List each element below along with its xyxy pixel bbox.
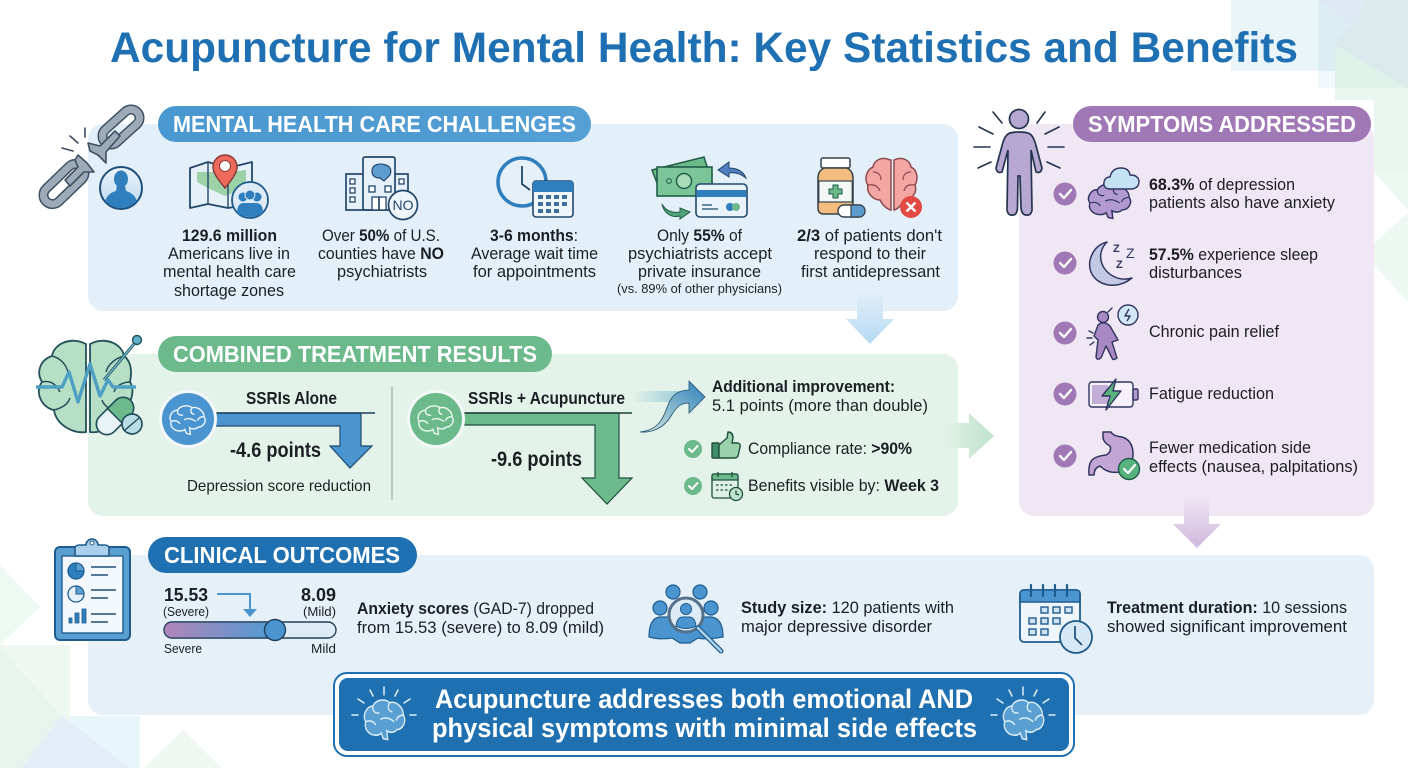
text: additional improvement xyxy=(712,378,928,415)
icon: moon and Z: Z xyxy=(1116,259,1123,271)
callout: key takeaway: Acupuncture addresses both emotional AND xyxy=(435,684,973,714)
text: anxiety scores: Anxiety scores (GAD-7) dropped xyxy=(357,600,594,618)
chart: SSRIs alone: -4.6 points xyxy=(230,439,321,462)
text: study size xyxy=(741,599,954,636)
divider xyxy=(391,387,393,500)
panel: combined treatment results xyxy=(36,336,958,516)
text: 3-6 months: 3-6 months: xyxy=(490,227,578,245)
icon: people with magnifier xyxy=(649,585,723,651)
stat: insurance xyxy=(617,157,782,296)
title: Acupuncture for Mental Health: Key Statistics and Benefits xyxy=(110,24,1298,72)
chart: severity scale: (Mild) xyxy=(303,605,336,619)
chart: SSRIs plus acupuncture: -9.6 points xyxy=(491,448,582,471)
arrow: results to symptoms xyxy=(940,413,994,459)
text: 55 percent: Only 55% of xyxy=(657,227,742,245)
text: 55 percent xyxy=(617,227,782,296)
item: benefits visible: Benefits visible by: Week 3 xyxy=(748,477,939,495)
item: benefits visible xyxy=(684,472,939,500)
item: side effects: Fewer medication side xyxy=(1149,439,1311,457)
chart: SSRIs plus acupuncture: SSRIs + Acupuncture xyxy=(468,388,625,408)
icon: person with rays xyxy=(974,110,1064,215)
arrow: symptoms to outcomes xyxy=(1173,495,1221,548)
icon: broken chain and person xyxy=(40,106,143,209)
icon: battery with bolt xyxy=(1089,379,1138,410)
chart: severity scale: (Severe) xyxy=(163,605,209,619)
item: depression and anxiety: patients also have anxiety xyxy=(1149,194,1336,212)
icon: blue brain circle xyxy=(159,390,217,448)
chart: SSRIs alone: Depression score reduction xyxy=(187,478,371,495)
item: sleep: 57.5% experience sleep xyxy=(1149,246,1318,264)
text: treatment duration xyxy=(1107,599,1347,636)
item: compliance rate: Compliance rate: >90% xyxy=(748,440,912,458)
icon: brain with needle and pills xyxy=(36,336,142,439)
text: 129.6 million: shortage zones xyxy=(174,282,284,300)
panel: clinical outcomes xyxy=(55,537,1374,715)
stat: shortage zones xyxy=(163,155,296,300)
heading: challenges xyxy=(158,106,591,142)
icon: brain right xyxy=(991,687,1055,740)
arrow: green down xyxy=(445,413,632,504)
text: 129.6 million: mental health care xyxy=(163,263,296,281)
item: chronic pain xyxy=(1054,305,1279,360)
icon: calendar with clock xyxy=(712,472,742,500)
panel: symptoms addressed xyxy=(974,106,1374,516)
chart: SSRIs plus acupuncture xyxy=(407,388,632,504)
heading: symptoms xyxy=(1073,106,1371,142)
item: sleep xyxy=(1054,242,1318,285)
stat: counties xyxy=(318,157,444,281)
text: treatment duration: showed significant improvement xyxy=(1107,618,1347,636)
text: 3-6 months: Average wait time xyxy=(471,245,598,263)
item: chronic pain: Chronic pain relief xyxy=(1149,323,1279,341)
icon: clipboard xyxy=(55,539,130,640)
text: study size: Study size: 120 patients with xyxy=(741,599,954,617)
item: side effects: effects (nausea, palpitations) xyxy=(1149,458,1358,476)
text: 129.6 million: 129.6 million xyxy=(182,227,277,245)
icon: brain with cloud xyxy=(1088,168,1139,218)
panel: mental health care challenges xyxy=(40,106,958,311)
callout: key takeaway xyxy=(334,673,1074,756)
text: 129.6 million: Americans live in xyxy=(168,245,290,263)
text: treatment duration: Treatment duration: 10 sessions xyxy=(1107,599,1347,617)
icon: moon and Z xyxy=(1090,242,1135,285)
heading: outcomes: CLINICAL OUTCOMES xyxy=(164,542,400,568)
text: 50 percent of counties: psychiatrists xyxy=(337,263,427,281)
text: 3-6 months xyxy=(471,227,598,281)
text: 50 percent of counties xyxy=(318,227,444,281)
item: sleep: disturbances xyxy=(1149,264,1242,282)
icon: money and card xyxy=(652,157,747,219)
icon: pill bottle and brain xyxy=(818,158,922,218)
chart: severity scale: Severe xyxy=(164,642,202,656)
text: 55 percent: (vs. 89% of other physicians) xyxy=(617,281,782,296)
text: two thirds: respond to their xyxy=(814,245,926,263)
icon: calendar with clock xyxy=(1020,585,1092,653)
text: anxiety scores: from 15.53 (severe) to 8.09 (mild) xyxy=(357,619,604,637)
text: two thirds xyxy=(797,227,942,281)
icon: green brain circle xyxy=(407,390,465,448)
arrow: blue down xyxy=(196,413,375,468)
text: study size: major depressive disorder xyxy=(741,618,932,636)
chart: severity scale: 15.53 xyxy=(164,585,208,605)
icon: moon and Z: Z xyxy=(1126,245,1135,261)
chart: SSRIs alone xyxy=(159,388,375,495)
stat: antidepressant xyxy=(797,158,942,281)
text: additional improvement: Additional improvement: xyxy=(712,378,895,396)
icon: stomach with check xyxy=(1089,432,1140,480)
item: fatigue xyxy=(1054,379,1274,410)
icon: thumbs up xyxy=(712,432,740,458)
icon: clock and calendar xyxy=(498,158,573,217)
text: two thirds: first antidepressant xyxy=(801,263,940,281)
stat: wait time xyxy=(471,158,598,281)
item: depression and anxiety: 68.3% of depression xyxy=(1149,176,1295,194)
text: 55 percent: psychiatrists accept xyxy=(628,245,772,263)
icon: hospital with NO: NO xyxy=(392,197,414,213)
chart: SSRIs alone: SSRIs Alone xyxy=(246,388,337,408)
heading: challenges: MENTAL HEALTH CARE CHALLENGES xyxy=(173,111,576,137)
text: 129.6 million xyxy=(163,227,296,300)
text: anxiety scores xyxy=(357,600,604,637)
icon: person in pain xyxy=(1087,305,1138,360)
text: two thirds: 2/3 of patients don't xyxy=(797,227,942,245)
chart: severity scale xyxy=(163,585,336,656)
chart: severity scale: Mild xyxy=(311,642,336,656)
heading: symptoms: SYMPTOMS ADDRESSED xyxy=(1088,111,1356,137)
arrow: curved to additional improvement xyxy=(634,381,705,432)
icon: map with pin and people xyxy=(190,155,268,218)
text: 50 percent of counties: counties have NO xyxy=(318,245,444,263)
callout: key takeaway: physical symptoms with minimal side effects xyxy=(432,713,977,743)
arrow: challenges to results xyxy=(846,290,894,344)
text: additional improvement: 5.1 points (more than double) xyxy=(712,397,928,415)
heading: results: COMBINED TREATMENT RESULTS xyxy=(173,341,537,367)
heading: results xyxy=(158,336,552,372)
item: fatigue: Fatigue reduction xyxy=(1149,385,1274,403)
text: 55 percent: private insurance xyxy=(638,263,761,281)
icon: moon and Z: Z xyxy=(1113,243,1120,255)
item: side effects xyxy=(1054,432,1358,480)
heading: outcomes xyxy=(148,537,417,573)
text: 3-6 months: for appointments xyxy=(473,263,596,281)
text: 50 percent of counties: Over 50% of U.S. xyxy=(322,227,440,245)
item: depression and anxiety xyxy=(1054,168,1336,218)
item: compliance rate xyxy=(684,432,912,458)
chart: severity scale: 8.09 xyxy=(301,585,336,605)
icon: brain left xyxy=(352,687,416,740)
